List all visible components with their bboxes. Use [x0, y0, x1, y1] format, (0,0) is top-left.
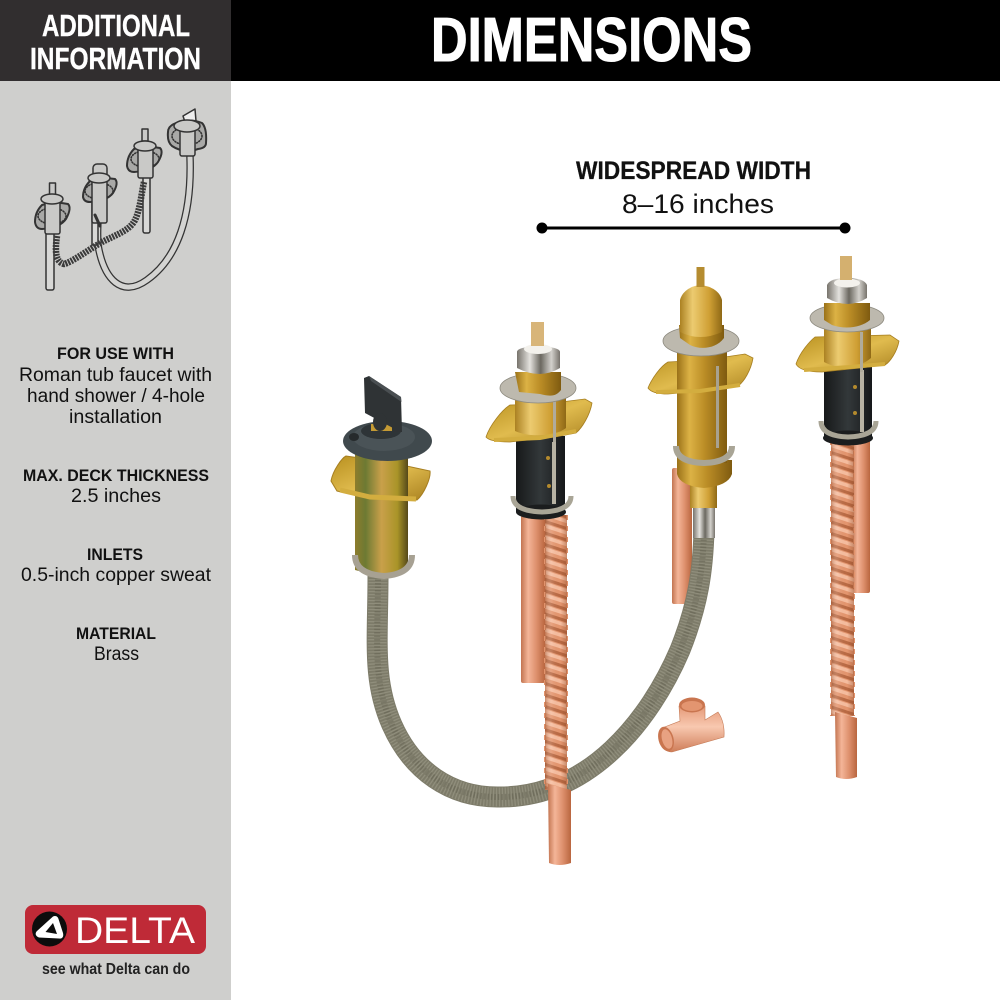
brass cap [680, 285, 722, 337]
text block: for use with: FOR USE WITH [57, 344, 174, 363]
text block: inlets: 0.5-inch copper sweat [21, 565, 212, 586]
line art: valve centre [83, 164, 117, 226]
header bar [231, 0, 1000, 81]
dimension: widespread width: 8–16 inches [622, 189, 774, 219]
chrome cap [827, 278, 867, 304]
text block: inlets: INLETS [87, 545, 143, 564]
text block: max deck thickness: 2.5 inches [71, 486, 161, 507]
flange front lip [494, 431, 576, 440]
washer [663, 326, 739, 356]
product: diverter valve [331, 376, 432, 576]
text block: for use with: Roman tub faucet with [19, 365, 212, 386]
delta logo: DELTA [75, 910, 195, 951]
line drawing of valve set [35, 109, 206, 290]
nut [515, 372, 561, 396]
washer [500, 373, 576, 403]
smooth tail [548, 784, 571, 865]
text block: material [76, 624, 156, 665]
product: centre valve rear tube [672, 468, 692, 604]
straight tube [852, 440, 870, 593]
line art: valve left [35, 183, 70, 234]
stem [371, 424, 392, 431]
stem [840, 256, 852, 280]
twisted tube [831, 440, 854, 716]
ring [513, 496, 571, 512]
heading: dimensions: DIMENSIONS [431, 6, 752, 75]
text block: max deck thickness: MAX. DECK THICKNESS [23, 466, 209, 485]
text block: inlets [21, 545, 212, 586]
bottom ring [355, 555, 412, 576]
lower hex [690, 484, 717, 508]
collar [679, 325, 724, 348]
flange [648, 354, 753, 394]
text block: for use with [19, 344, 212, 428]
dimension line [542, 226, 845, 230]
product: centre valve [648, 267, 753, 538]
product: right valve [796, 256, 899, 446]
dimension: widespread width [536, 157, 850, 234]
text block: material: MATERIAL [76, 624, 156, 643]
plastic ring [343, 421, 432, 461]
product: left valve [486, 322, 592, 865]
sidebar panel [0, 81, 231, 1000]
smooth tail [835, 712, 857, 779]
chrome cap [517, 346, 560, 374]
product: copper tee fitting [656, 698, 724, 753]
text block: material: Brass [94, 644, 139, 665]
sidebar header: ADDITIONAL [42, 8, 190, 43]
stem [531, 322, 544, 346]
flange front lip [656, 385, 740, 392]
flange [486, 399, 592, 442]
text block: for use with: installation [69, 407, 162, 428]
line art: corrugated connector [56, 182, 144, 264]
nut [824, 303, 870, 327]
text block: max deck thickness [23, 466, 209, 507]
icon: delta mark [32, 912, 67, 946]
ferrule [693, 506, 715, 538]
twisted copper tube [545, 515, 567, 790]
flange front lip [340, 490, 416, 499]
sidebar header [0, 0, 231, 81]
sidebar header: INFORMATION [30, 41, 201, 76]
flange [331, 456, 430, 500]
straight copper tube [521, 515, 545, 683]
delta logo: see what Delta can do [42, 961, 190, 978]
ring [821, 421, 876, 437]
flange front lip [804, 364, 885, 370]
product: right valve copper tubes [831, 440, 870, 779]
line art: diverter valve [168, 109, 206, 156]
line art: braided hose [98, 157, 190, 287]
line art: valve right [127, 129, 162, 178]
flange [796, 335, 899, 372]
delta logo [25, 905, 206, 978]
washer [810, 304, 884, 332]
ring [676, 446, 732, 463]
line art: tubes [46, 175, 150, 290]
black body [824, 364, 872, 438]
black body [516, 436, 565, 512]
product: braided hose [377, 530, 704, 797]
handle [364, 376, 402, 432]
dimension: widespread width: WIDESPREAD WIDTH [576, 157, 811, 185]
stem [696, 267, 704, 287]
main body [677, 345, 727, 463]
text block: for use with: hand shower / 4-hole [27, 386, 205, 407]
body [355, 450, 408, 574]
